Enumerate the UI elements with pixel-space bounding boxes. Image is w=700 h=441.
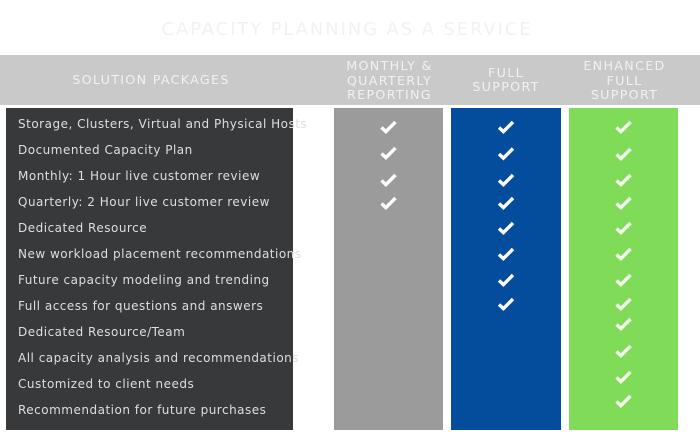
feature list: Full access for questions and answers <box>18 299 263 313</box>
heading: monthly and quarterly reporting <box>346 58 433 102</box>
icons: monthly and quarterly checks <box>382 122 396 208</box>
panel: monthly and quarterly column <box>334 108 443 430</box>
feature list: Documented Capacity Plan <box>18 143 193 157</box>
feature list: Quarterly: 2 Hour live customer review <box>18 195 270 209</box>
feature list: Dedicated Resource <box>18 221 147 235</box>
icons: enhanced full support checks <box>616 122 630 406</box>
feature list: Customized to client needs <box>18 377 194 391</box>
heading: full support: SUPPORT <box>472 79 540 94</box>
heading: solution packages: SOLUTION PACKAGES <box>72 72 230 87</box>
heading: full support <box>472 64 540 94</box>
heading: monthly and quarterly reporting: REPORTING <box>347 87 432 102</box>
heading: monthly and quarterly reporting: MONTHLY & <box>346 58 433 73</box>
title: CAPACITY PLANNING AS A SERVICE <box>162 19 532 40</box>
heading: monthly and quarterly reporting: QUARTERLY <box>347 72 432 88</box>
icons: full support checks <box>499 122 513 309</box>
feature list: Dedicated Resource/Team <box>18 325 185 339</box>
heading: full support: FULL <box>488 64 524 80</box>
feature list: New workload placement recommendations <box>18 247 302 261</box>
heading: enhanced full support: FULL <box>607 72 642 88</box>
heading: enhanced full support: SUPPORT <box>591 87 658 102</box>
feature list: All capacity analysis and recommendations <box>18 351 299 365</box>
panel: enhanced full support column <box>569 108 678 430</box>
feature list: Monthly: 1 Hour live customer review <box>18 169 260 183</box>
heading: enhanced full support <box>583 58 666 102</box>
heading: enhanced full support: ENHANCED <box>583 58 666 73</box>
header band <box>0 55 700 104</box>
feature list: Recommendation for future purchases <box>18 403 266 417</box>
feature list: Future capacity modeling and trending <box>18 273 270 287</box>
feature list: Storage, Clusters, Virtual and Physical Hosts <box>18 117 307 131</box>
panel: solution packages list <box>6 108 293 430</box>
panel: full support column <box>451 108 561 430</box>
